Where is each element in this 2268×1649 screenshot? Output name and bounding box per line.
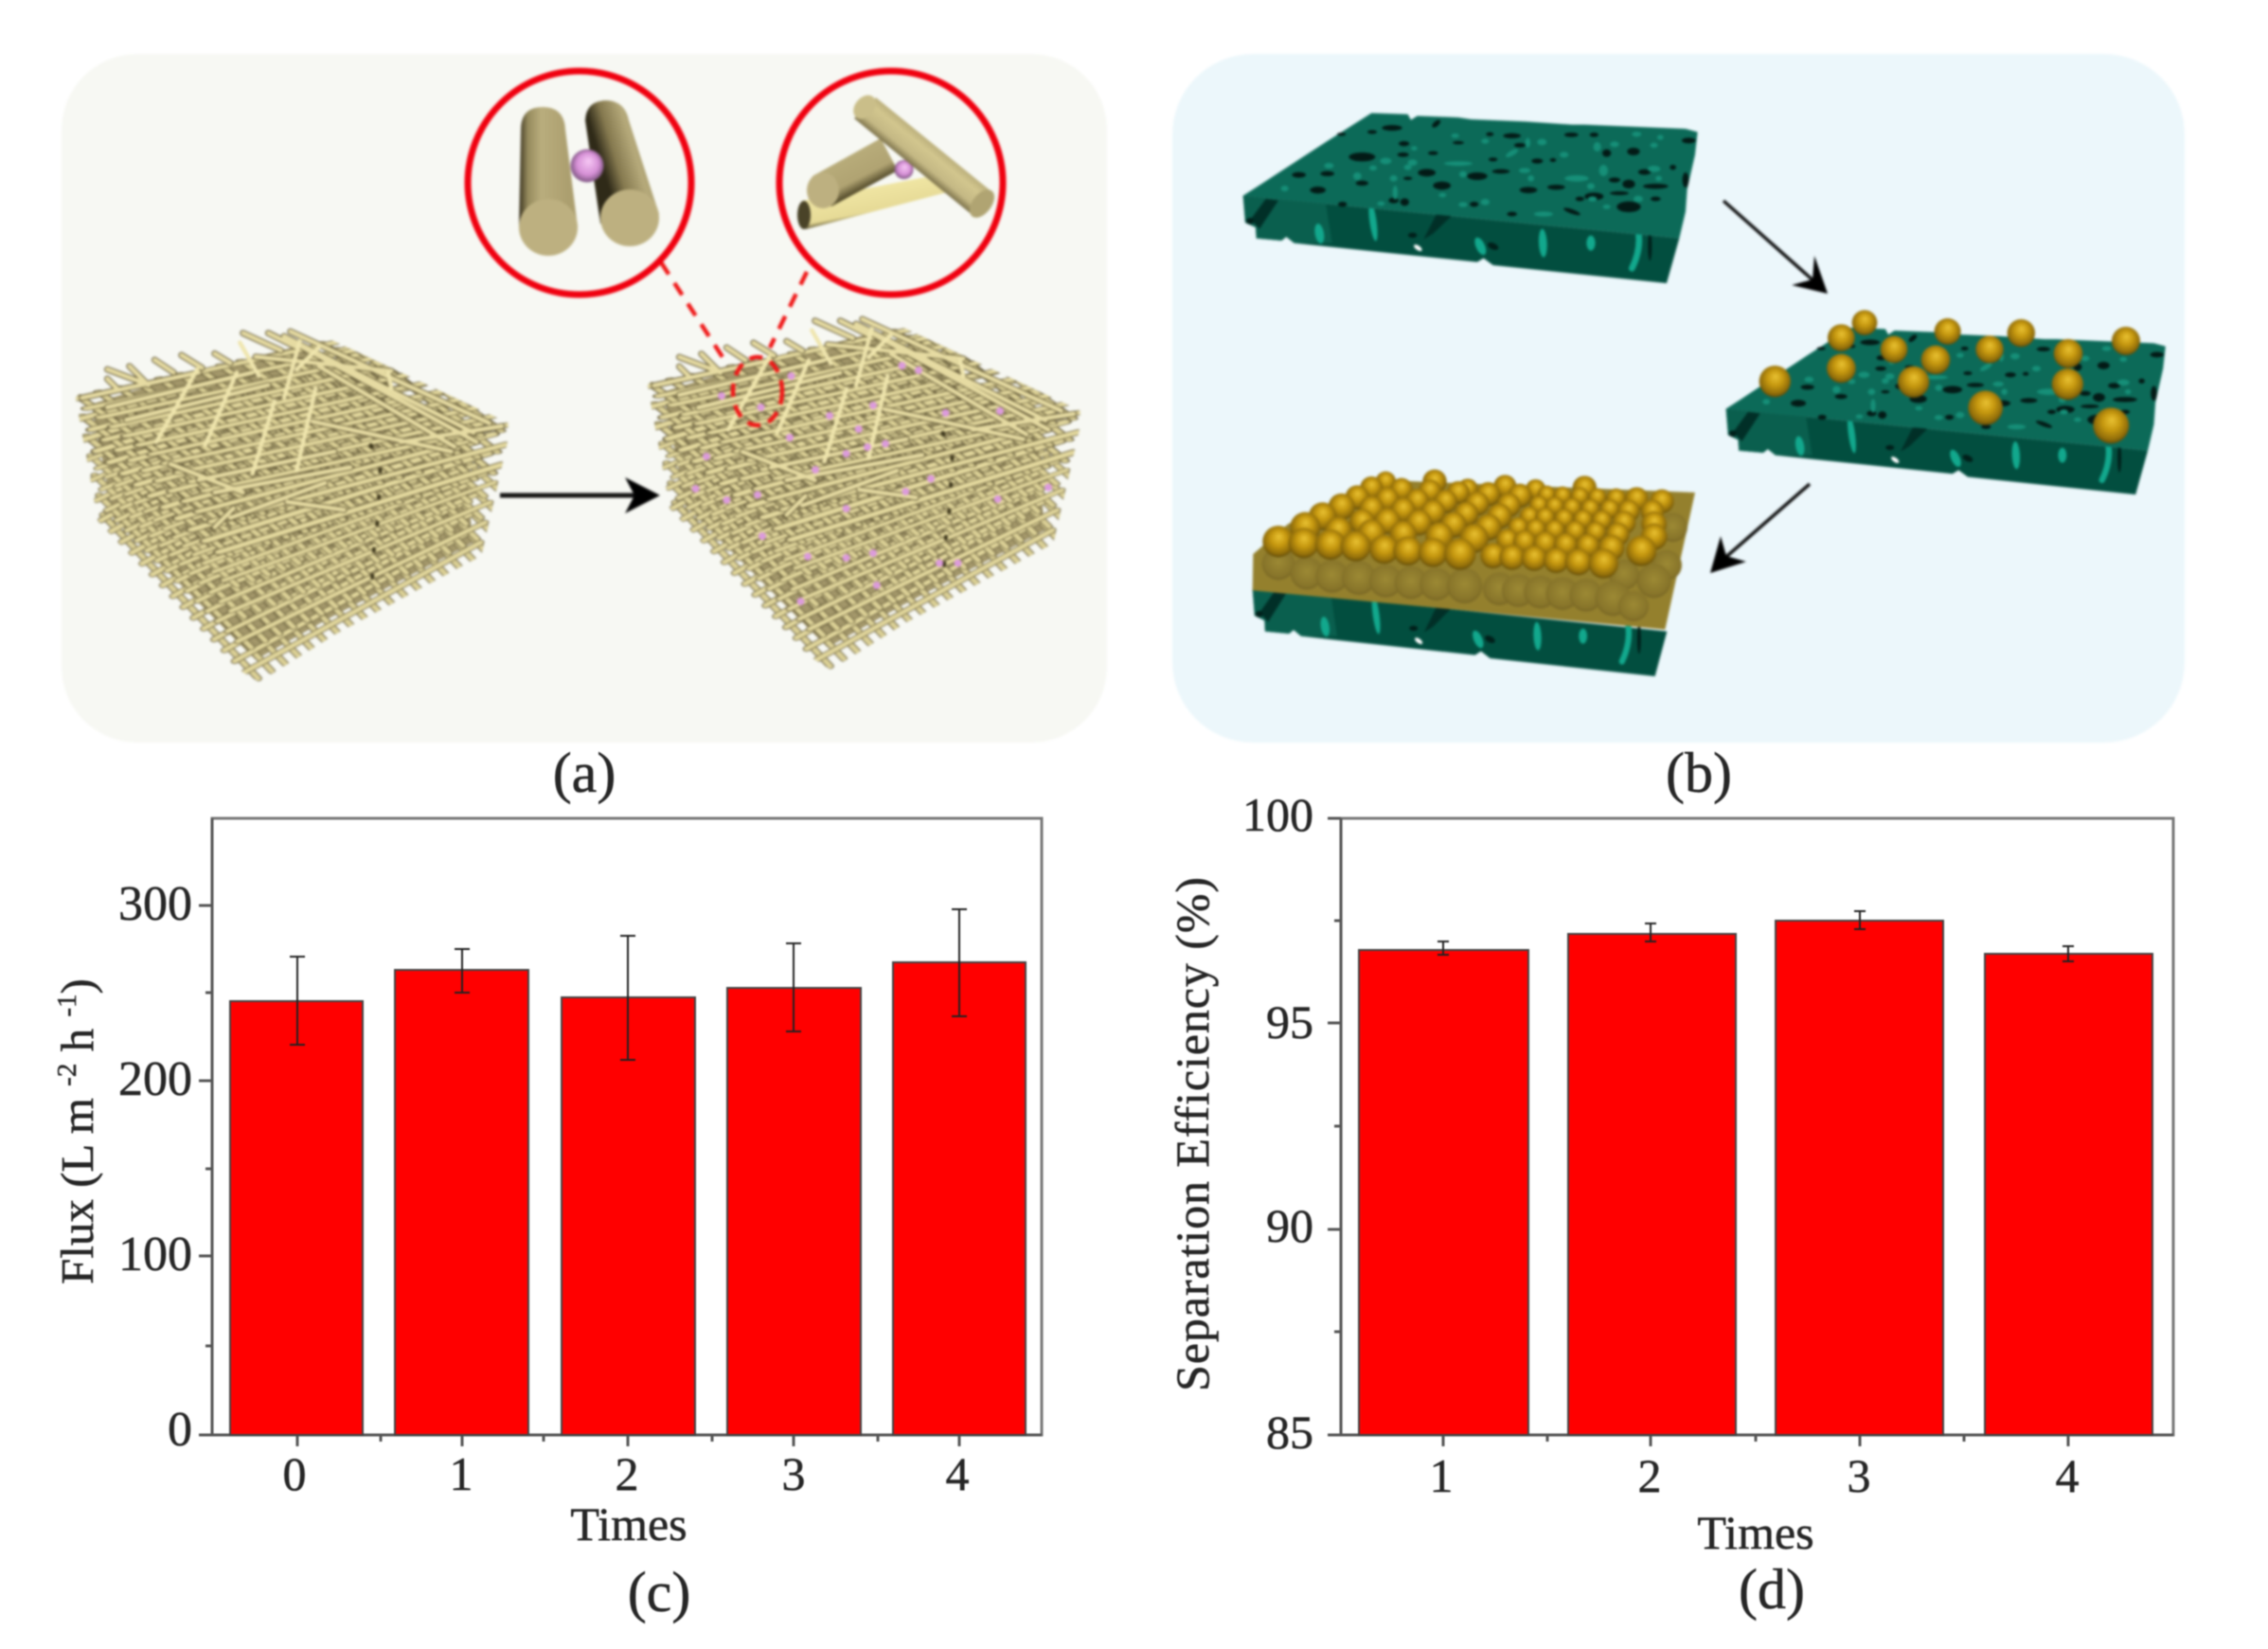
x tick labels d: 3 bbox=[1847, 1449, 1871, 1502]
x axis title d: Times bbox=[1697, 1506, 1814, 1559]
label (c): (c) bbox=[628, 1561, 690, 1623]
chart: d separation efficiency bar chart bbox=[1166, 788, 2173, 1559]
error bars c bbox=[290, 909, 967, 1060]
inset: parallel fibres with particle bbox=[468, 71, 691, 295]
axes frame c bbox=[199, 818, 1042, 1446]
fibre block: pristine bbox=[72, 331, 516, 681]
y axis title d: Separation Efficiency (%) bbox=[1166, 877, 1219, 1391]
arrow: bare to seeded bbox=[1723, 201, 1828, 294]
x tick labels c: 3 bbox=[782, 1447, 805, 1500]
y tick labels d: 95 bbox=[1266, 995, 1313, 1049]
x tick labels c: 4 bbox=[945, 1447, 970, 1500]
y tick labels d: 85 bbox=[1266, 1406, 1313, 1459]
x tick labels d: 2 bbox=[1638, 1449, 1661, 1502]
y tick labels d: 100 bbox=[1242, 788, 1313, 841]
y axis title c: -2 bbox=[52, 1064, 82, 1086]
y tick labels c: 0 bbox=[168, 1403, 192, 1457]
x tick labels c: 1 bbox=[449, 1447, 473, 1500]
fibre block: with particles bbox=[644, 318, 1088, 669]
panel b background bbox=[1172, 54, 2185, 743]
inset: crossing fibres with particle bbox=[779, 71, 1003, 295]
arrow: seeded to coated bbox=[1710, 484, 1810, 573]
y tick labels d bbox=[1242, 788, 1313, 1459]
arrow: block to block bbox=[500, 477, 660, 513]
panel: b membrane coating illustration bbox=[1172, 54, 2185, 743]
panel: a fibre network illustration bbox=[62, 54, 1107, 743]
membrane: coated with gold layer bbox=[1253, 470, 1695, 676]
x tick labels c bbox=[282, 1447, 970, 1500]
y axis title c: Flux (L m bbox=[51, 1098, 103, 1284]
label (d): (d) bbox=[1739, 1558, 1805, 1621]
bars d bbox=[1359, 921, 2152, 1435]
y axis title c: ) bbox=[51, 978, 103, 994]
label (a): (a) bbox=[553, 742, 616, 804]
x tick labels c: 2 bbox=[616, 1447, 638, 1500]
membrane: seeded with spheres bbox=[1726, 310, 2166, 494]
x tick labels d bbox=[1430, 1449, 2080, 1502]
dashed zoom lines bbox=[661, 262, 807, 425]
error bars d bbox=[1438, 911, 2074, 961]
y axis title c: h bbox=[51, 1017, 103, 1064]
label (b): (b) bbox=[1666, 742, 1732, 804]
y tick labels d: 90 bbox=[1266, 1199, 1313, 1252]
y tick labels c: 200 bbox=[118, 1052, 192, 1106]
y tick labels c: 300 bbox=[118, 877, 192, 931]
bars c bbox=[230, 962, 1026, 1435]
x tick labels c: 0 bbox=[282, 1447, 307, 1500]
x axis title c: Times bbox=[570, 1497, 688, 1550]
y tick labels c: 100 bbox=[118, 1228, 192, 1282]
y axis title c: -1 bbox=[52, 994, 82, 1017]
axes frame d bbox=[1328, 818, 2173, 1446]
chart: c flux bar chart bbox=[51, 818, 1042, 1550]
y tick labels c bbox=[118, 877, 192, 1457]
panel a background bbox=[62, 54, 1107, 743]
x tick labels d: 1 bbox=[1430, 1449, 1453, 1502]
membrane: bare bbox=[1243, 113, 1698, 283]
x tick labels d: 4 bbox=[2055, 1449, 2080, 1502]
